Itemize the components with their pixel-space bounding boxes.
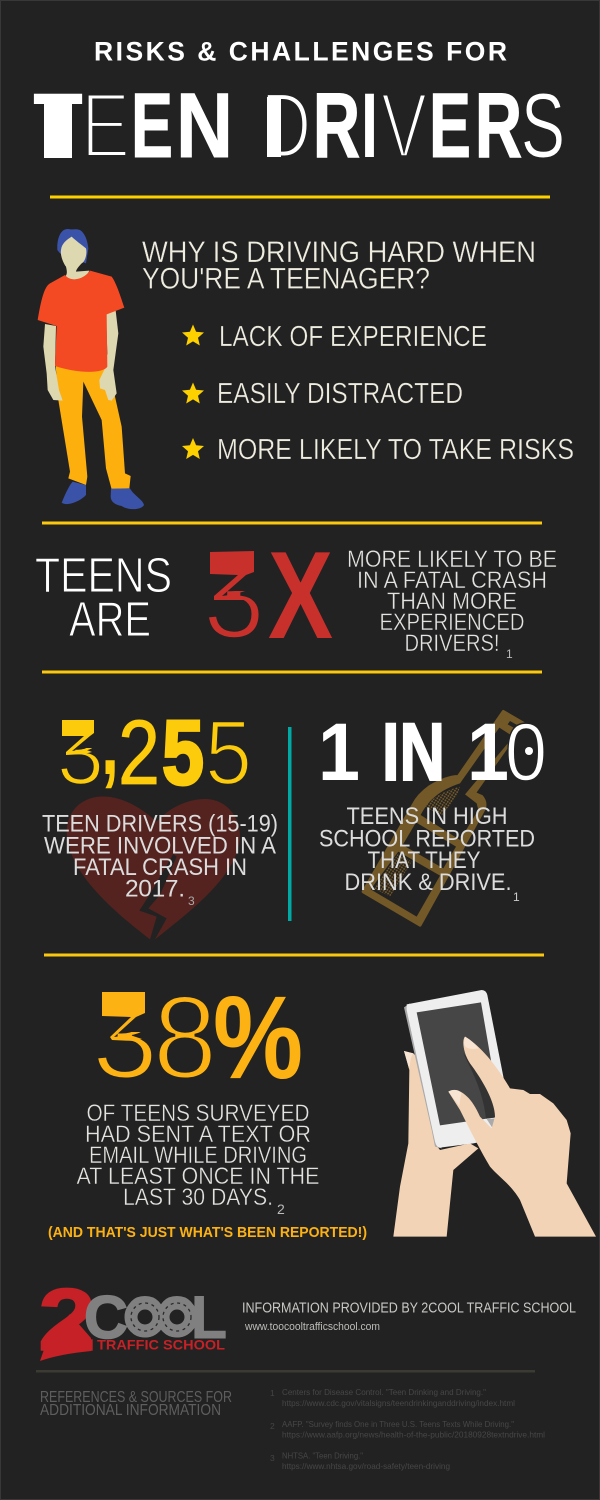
text: teen drivers fatal crash: FATAL CRASH IN: [73, 854, 247, 881]
text: teens surveyed: EMAIL WHILE DRIVING: [89, 1142, 307, 1169]
title: R: [313, 75, 360, 177]
bullet list: reasons: LACK OF EXPERIENCE: [219, 321, 487, 353]
text: teens in high school: SCHOOL REPORTED: [319, 826, 535, 852]
references list: https://www.nhtsa.gov/road-safety/teen-driving: [282, 1461, 450, 1471]
stat: 3,255: 2: [118, 702, 160, 804]
references list: NHTSA. "Teen Driving.": [282, 1450, 363, 1460]
stat: 38%: 3: [92, 972, 158, 1104]
bullet list: reasons: EASILY DISTRACTED: [217, 378, 463, 410]
stat: 3X: [203, 527, 333, 665]
stat: 1 in 10: 1: [318, 707, 360, 798]
icon: hands holding phone: [393, 990, 596, 1237]
text: more likely fatal crash: IN A FATAL CRASH: [357, 567, 547, 594]
stat: 3,255: 5: [205, 702, 252, 804]
stat: 38%: %: [213, 972, 303, 1104]
title: E: [429, 75, 471, 177]
title: E: [81, 75, 130, 177]
text: teens in high school: THAT THEY: [368, 847, 480, 874]
heading: why is driving hard: WHY IS DRIVING HARD WHEN: [142, 236, 536, 269]
stat: 1 in 10: 1: [467, 707, 509, 798]
title: I: [361, 75, 378, 177]
stat: 1 in 10: [318, 707, 547, 798]
title: [33, 75, 565, 177]
title: R: [475, 75, 522, 177]
text: more likely fatal crash: EXPERIENCED: [380, 609, 524, 636]
text: teens surveyed: 2: [277, 1201, 285, 1217]
heading: references: REFERENCES & SOURCES FOR: [40, 1389, 232, 1406]
references list: [270, 1387, 545, 1471]
references list: https://www.cdc.gov/vitalsigns/teendrinkinganddriving/index.html: [282, 1398, 515, 1408]
references list: 2: [270, 1421, 275, 1431]
text: more likely fatal crash: 1: [506, 647, 513, 661]
icon: bottle: [363, 712, 523, 925]
logo: 2cool traffic school: O: [156, 1285, 198, 1350]
stat: 1 in 10: IN: [382, 707, 445, 798]
title: V: [381, 75, 427, 177]
callout: just what's been reported: (AND THAT'S JUST WHAT'S BEEN REPORTED!): [48, 1224, 367, 1241]
heading: references: ADDITIONAL INFORMATION: [40, 1402, 221, 1419]
logo: 2cool traffic school: L: [191, 1284, 227, 1351]
text: teens in high school: DRINK & DRIVE.: [344, 869, 512, 896]
teens are: TEENS: [35, 549, 172, 603]
stat: 3,255: 3: [57, 702, 104, 804]
logo: 2cool traffic school: TRAFFIC SCHOOL: [97, 1336, 225, 1352]
stat: 1 in 10: 0: [505, 707, 547, 798]
references list: https://www.aafp.org/news/health-of-the-public/20180928textndrive.html: [282, 1430, 545, 1440]
stat: 38%: 8: [153, 972, 217, 1104]
logo: 2cool traffic school: 2: [38, 1270, 96, 1369]
text: information provided by: www.toocooltrafficschool.com: [244, 1321, 380, 1333]
icon: broken heart: [67, 797, 240, 939]
text: teen drivers fatal crash: 3: [188, 894, 195, 908]
stat: 3X: X: [268, 527, 333, 665]
text: more likely fatal crash: MORE LIKELY TO BE: [347, 546, 557, 573]
stat: 3,255: [56, 692, 252, 804]
heading: why is driving hard: [142, 236, 536, 296]
subtitle: RISKS & CHALLENGES FOR: [94, 36, 507, 66]
text: teens in high school: TEENS IN HIGH: [346, 803, 508, 830]
text: more likely fatal crash: THAN MORE: [387, 588, 517, 615]
teens are: ARE: [69, 593, 151, 647]
text: more likely fatal crash: [347, 546, 557, 661]
title: T: [33, 75, 83, 177]
references list: Centers for Disease Control. "Teen Drinking and Driving.": [282, 1387, 486, 1397]
text: teen drivers fatal crash: TEEN DRIVERS (15-19): [42, 810, 278, 838]
title: D: [261, 75, 311, 177]
text: teens surveyed: AT LEAST ONCE IN THE: [76, 1163, 320, 1190]
text: teen drivers fatal crash: 2017.: [125, 876, 185, 902]
teens are: [35, 549, 172, 647]
stat: 3,255: 5: [162, 702, 204, 804]
text: teens surveyed: [76, 1100, 320, 1217]
logo: 2cool traffic school: [38, 1270, 227, 1369]
text: information provided by: [242, 1300, 576, 1333]
logo: 2cool traffic school: O: [124, 1285, 166, 1350]
title: E: [131, 75, 173, 177]
references list: 1: [270, 1388, 275, 1398]
text: more likely fatal crash: DRIVERS!: [404, 630, 500, 657]
icon: teenager figure: [38, 229, 144, 509]
references list: 3: [270, 1453, 275, 1463]
heading: references: [40, 1389, 232, 1419]
text: teens in high school: [319, 803, 535, 904]
text: teen drivers fatal crash: [42, 810, 278, 908]
references list: AAFP. "Survey finds One in Three U.S. Teens Texts While Driving.": [282, 1419, 514, 1429]
stat: 3X: 3: [203, 527, 265, 665]
text: teens surveyed: LAST 30 DAYS.: [123, 1184, 273, 1211]
title: N: [176, 75, 233, 177]
stat: 3,255: ,: [101, 692, 119, 794]
logo: 2cool traffic school: C: [84, 1284, 128, 1351]
heading: why is driving hard: YOU'RE A TEENAGER?: [142, 262, 430, 296]
text: teens in high school: 1: [513, 890, 520, 904]
text: teens surveyed: HAD SENT A TEXT OR: [85, 1121, 311, 1148]
bullet list: reasons: [182, 321, 574, 466]
text: teens surveyed: OF TEENS SURVEYED: [86, 1100, 310, 1127]
title: S: [521, 75, 565, 177]
stat: 38%: [92, 972, 303, 1104]
text: teen drivers fatal crash: WERE INVOLVED IN A: [44, 832, 277, 860]
